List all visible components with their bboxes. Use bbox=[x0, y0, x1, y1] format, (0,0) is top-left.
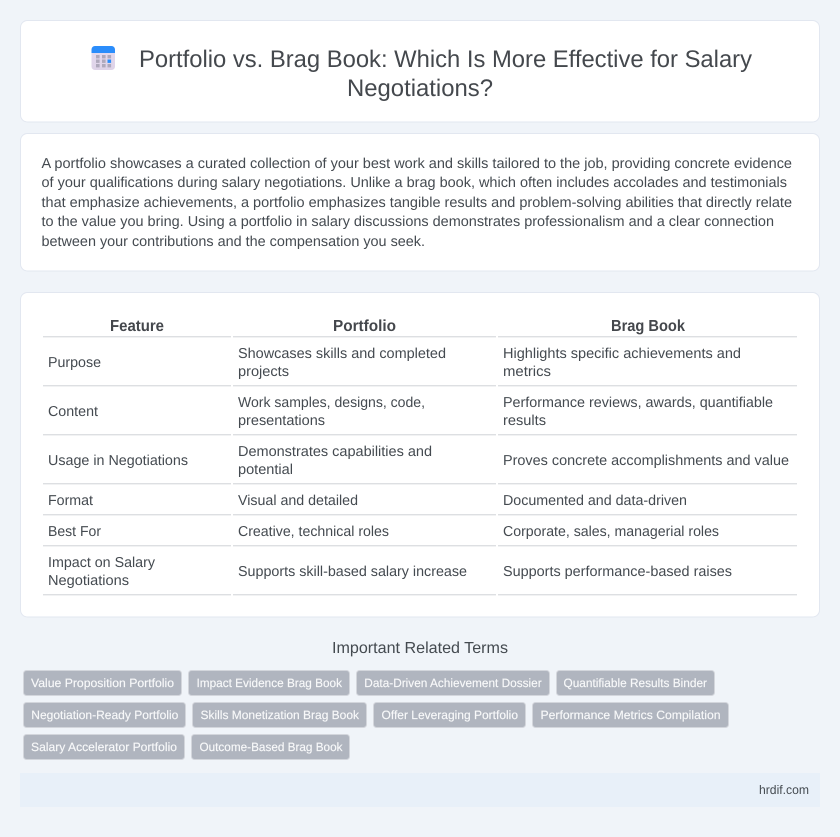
heading: important related terms: Important Related Terms bbox=[332, 640, 508, 657]
row: format bbox=[48, 493, 687, 509]
row: usage in negotiations: potential bbox=[238, 462, 293, 478]
panel: title header bbox=[20, 20, 820, 122]
tag: Salary Accelerator Portfolio bbox=[31, 740, 177, 754]
table header row: Feature bbox=[110, 318, 164, 335]
table header row: Brag Book bbox=[611, 318, 685, 335]
row: best for: Creative, technical roles bbox=[238, 524, 389, 540]
row: best for: Corporate, sales, managerial roles bbox=[503, 524, 719, 540]
footer bar: hrdif.com bbox=[759, 783, 809, 797]
row: content bbox=[48, 395, 773, 429]
tag bbox=[356, 670, 550, 696]
tag bbox=[24, 702, 186, 728]
tag bbox=[192, 702, 366, 728]
row: usage in negotiations: Demonstrates capabilities and bbox=[238, 444, 432, 460]
title bbox=[139, 46, 752, 102]
tag bbox=[24, 670, 182, 696]
panel: intro paragraph: to the value you bring. Using a portfolio in salary discussions demonstrates professionalism and a clear connection bbox=[42, 214, 774, 230]
panel: intro paragraph: A portfolio showcases a curated collection of your best work and skills tailored to the job, providing concrete evidence bbox=[42, 156, 792, 172]
panel: intro paragraph: that emphasize achievements, a portfolio emphasizes tangible results and problem-solving abilities that directly relate bbox=[42, 195, 792, 211]
table header row bbox=[110, 318, 685, 335]
row: format: Format bbox=[48, 493, 93, 509]
row: format: Documented and data-driven bbox=[503, 493, 687, 509]
row: content: Performance reviews, awards, quantifiable bbox=[503, 395, 773, 411]
tag: Performance Metrics Compilation bbox=[540, 708, 720, 722]
tag bbox=[532, 702, 728, 728]
tag: Skills Monetization Brag Book bbox=[200, 708, 360, 722]
footer bar bbox=[20, 773, 820, 807]
table header row: Portfolio bbox=[333, 318, 396, 335]
row: purpose: Highlights specific achievements and bbox=[503, 346, 741, 362]
panel: comparison table bbox=[20, 292, 820, 617]
row: purpose: Purpose bbox=[48, 355, 101, 371]
row: impact on salary negotiations: Negotiations bbox=[48, 573, 129, 589]
row: purpose: metrics bbox=[503, 364, 551, 380]
tag bbox=[192, 734, 350, 760]
panel: intro paragraph bbox=[20, 134, 820, 271]
icon: calendar bbox=[92, 46, 115, 70]
tag: Value Proposition Portfolio bbox=[31, 676, 174, 690]
row: usage in negotiations bbox=[48, 444, 789, 478]
row: content: presentations bbox=[238, 413, 325, 429]
tag: Quantifiable Results Binder bbox=[564, 676, 707, 690]
row: impact on salary negotiations: Supports skill-based salary increase bbox=[238, 564, 467, 580]
related terms tags bbox=[24, 670, 728, 760]
panel: intro paragraph: between your contributions and the compensation you seek. bbox=[42, 234, 425, 250]
row: impact on salary negotiations: Supports performance-based raises bbox=[503, 564, 732, 580]
tag bbox=[24, 734, 184, 760]
tag: Outcome-Based Brag Book bbox=[200, 740, 343, 754]
row: usage in negotiations: Usage in Negotiations bbox=[48, 453, 188, 469]
row: impact on salary negotiations bbox=[48, 555, 732, 589]
tag: Negotiation-Ready Portfolio bbox=[31, 708, 179, 722]
row: purpose: projects bbox=[238, 364, 289, 380]
row: content: results bbox=[503, 413, 546, 429]
row: usage in negotiations: Proves concrete accomplishments and value bbox=[503, 453, 789, 469]
tag: Offer Leveraging Portfolio bbox=[382, 708, 518, 722]
tag bbox=[556, 670, 714, 696]
title: Portfolio vs. Brag Book: Which Is More Effective for Salary bbox=[139, 46, 752, 73]
tag bbox=[188, 670, 350, 696]
row: best for: Best For bbox=[48, 524, 101, 540]
row: content: Content bbox=[48, 404, 98, 420]
row: content: Work samples, designs, code, bbox=[238, 395, 425, 411]
tag: Data-Driven Achievement Dossier bbox=[364, 676, 542, 690]
row: format: Visual and detailed bbox=[238, 493, 358, 509]
row: purpose bbox=[48, 346, 741, 380]
title: Negotiations? bbox=[347, 75, 493, 102]
panel: intro paragraph: of your qualifications during salary negotiations. Unlike a brag book, which often includes accolades and testimonials bbox=[42, 175, 787, 191]
row: best for bbox=[48, 524, 719, 540]
tag: Impact Evidence Brag Book bbox=[196, 676, 343, 690]
tag bbox=[374, 702, 526, 728]
row: impact on salary negotiations: Impact on Salary bbox=[48, 555, 156, 571]
row: purpose: Showcases skills and completed bbox=[238, 346, 446, 362]
